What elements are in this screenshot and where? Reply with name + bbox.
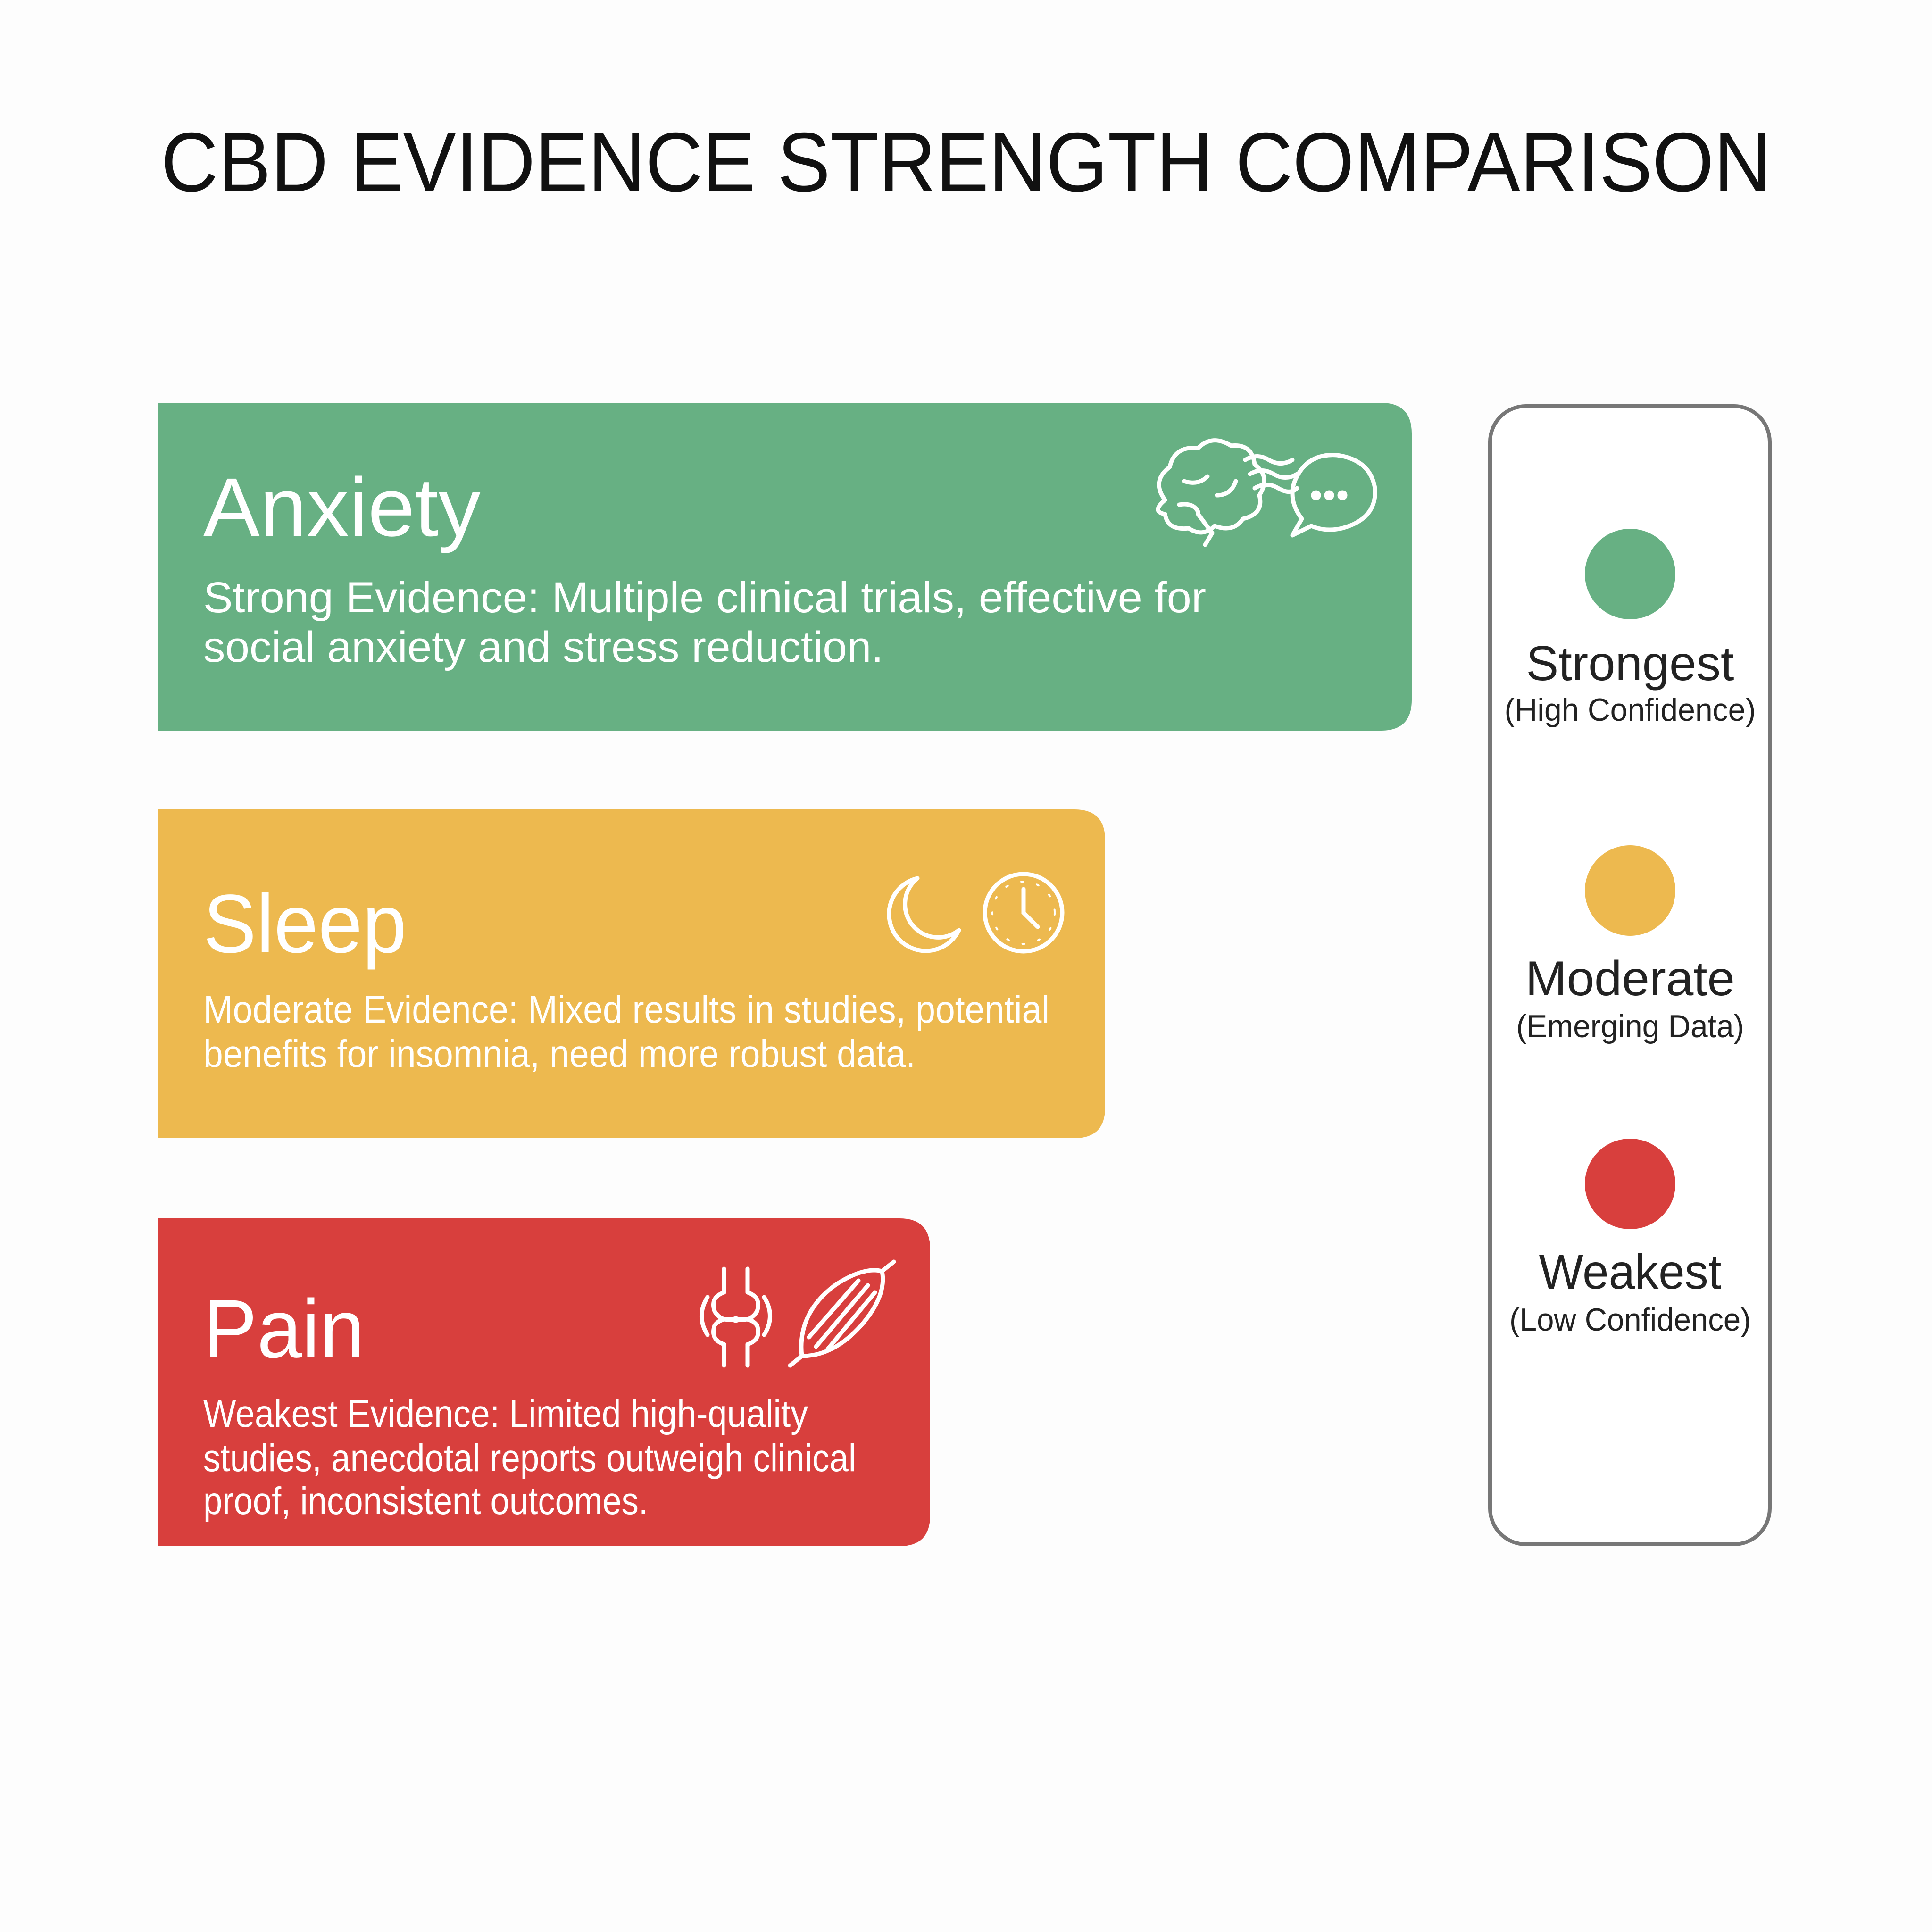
- text: pain evidence: proof, inconsistent outcomes.: [203, 1480, 648, 1523]
- legend: weakest: Weakest: [1539, 1245, 1722, 1299]
- panel: anxiety: [158, 403, 1412, 731]
- legend: strongest: [1505, 529, 1756, 728]
- legend: weakest: (Low Confidence): [1509, 1302, 1751, 1338]
- text: anxiety evidence: [203, 574, 1206, 671]
- title: CBD EVIDENCE STRENGTH COMPARISON: [161, 115, 1771, 209]
- legend panel: [1490, 406, 1770, 1544]
- icon: muscle: [790, 1262, 894, 1366]
- text: sleep evidence: [203, 988, 1049, 1075]
- legend: weakest: [1509, 1139, 1751, 1338]
- legend: moderate: (Emerging Data): [1516, 1008, 1744, 1044]
- icon: joint: [702, 1269, 770, 1366]
- text: pain evidence: studies, anecdotal reports outweigh clinical: [203, 1437, 856, 1480]
- icon: brain: [1158, 441, 1297, 545]
- text: anxiety evidence: Strong Evidence: Multiple clinical trials, effective for: [203, 574, 1206, 622]
- panel: sleep: [158, 809, 1105, 1138]
- legend: strongest: (High Confidence): [1505, 692, 1756, 728]
- heading: pain: Pain: [203, 1283, 365, 1375]
- legend: moderate: [1516, 845, 1744, 1044]
- icon: moon: [889, 878, 959, 951]
- text: pain evidence: [203, 1392, 856, 1523]
- text: anxiety evidence: social anxiety and stress reduction.: [203, 623, 883, 671]
- text: sleep evidence: benefits for insomnia, need more robust data.: [203, 1033, 916, 1075]
- heading: anxiety: Anxiety: [203, 461, 481, 554]
- text: pain evidence: Weakest Evidence: Limited high-quality: [203, 1392, 808, 1435]
- text: sleep evidence: Moderate Evidence: Mixed results in studies, potential: [203, 988, 1049, 1031]
- heading: sleep: Sleep: [203, 878, 407, 970]
- icon: clock: [985, 874, 1062, 951]
- legend: strongest: Strongest: [1526, 636, 1734, 691]
- icon: speech bubble: [1292, 455, 1375, 535]
- legend: moderate: Moderate: [1525, 951, 1735, 1006]
- panel: pain: [158, 1218, 930, 1546]
